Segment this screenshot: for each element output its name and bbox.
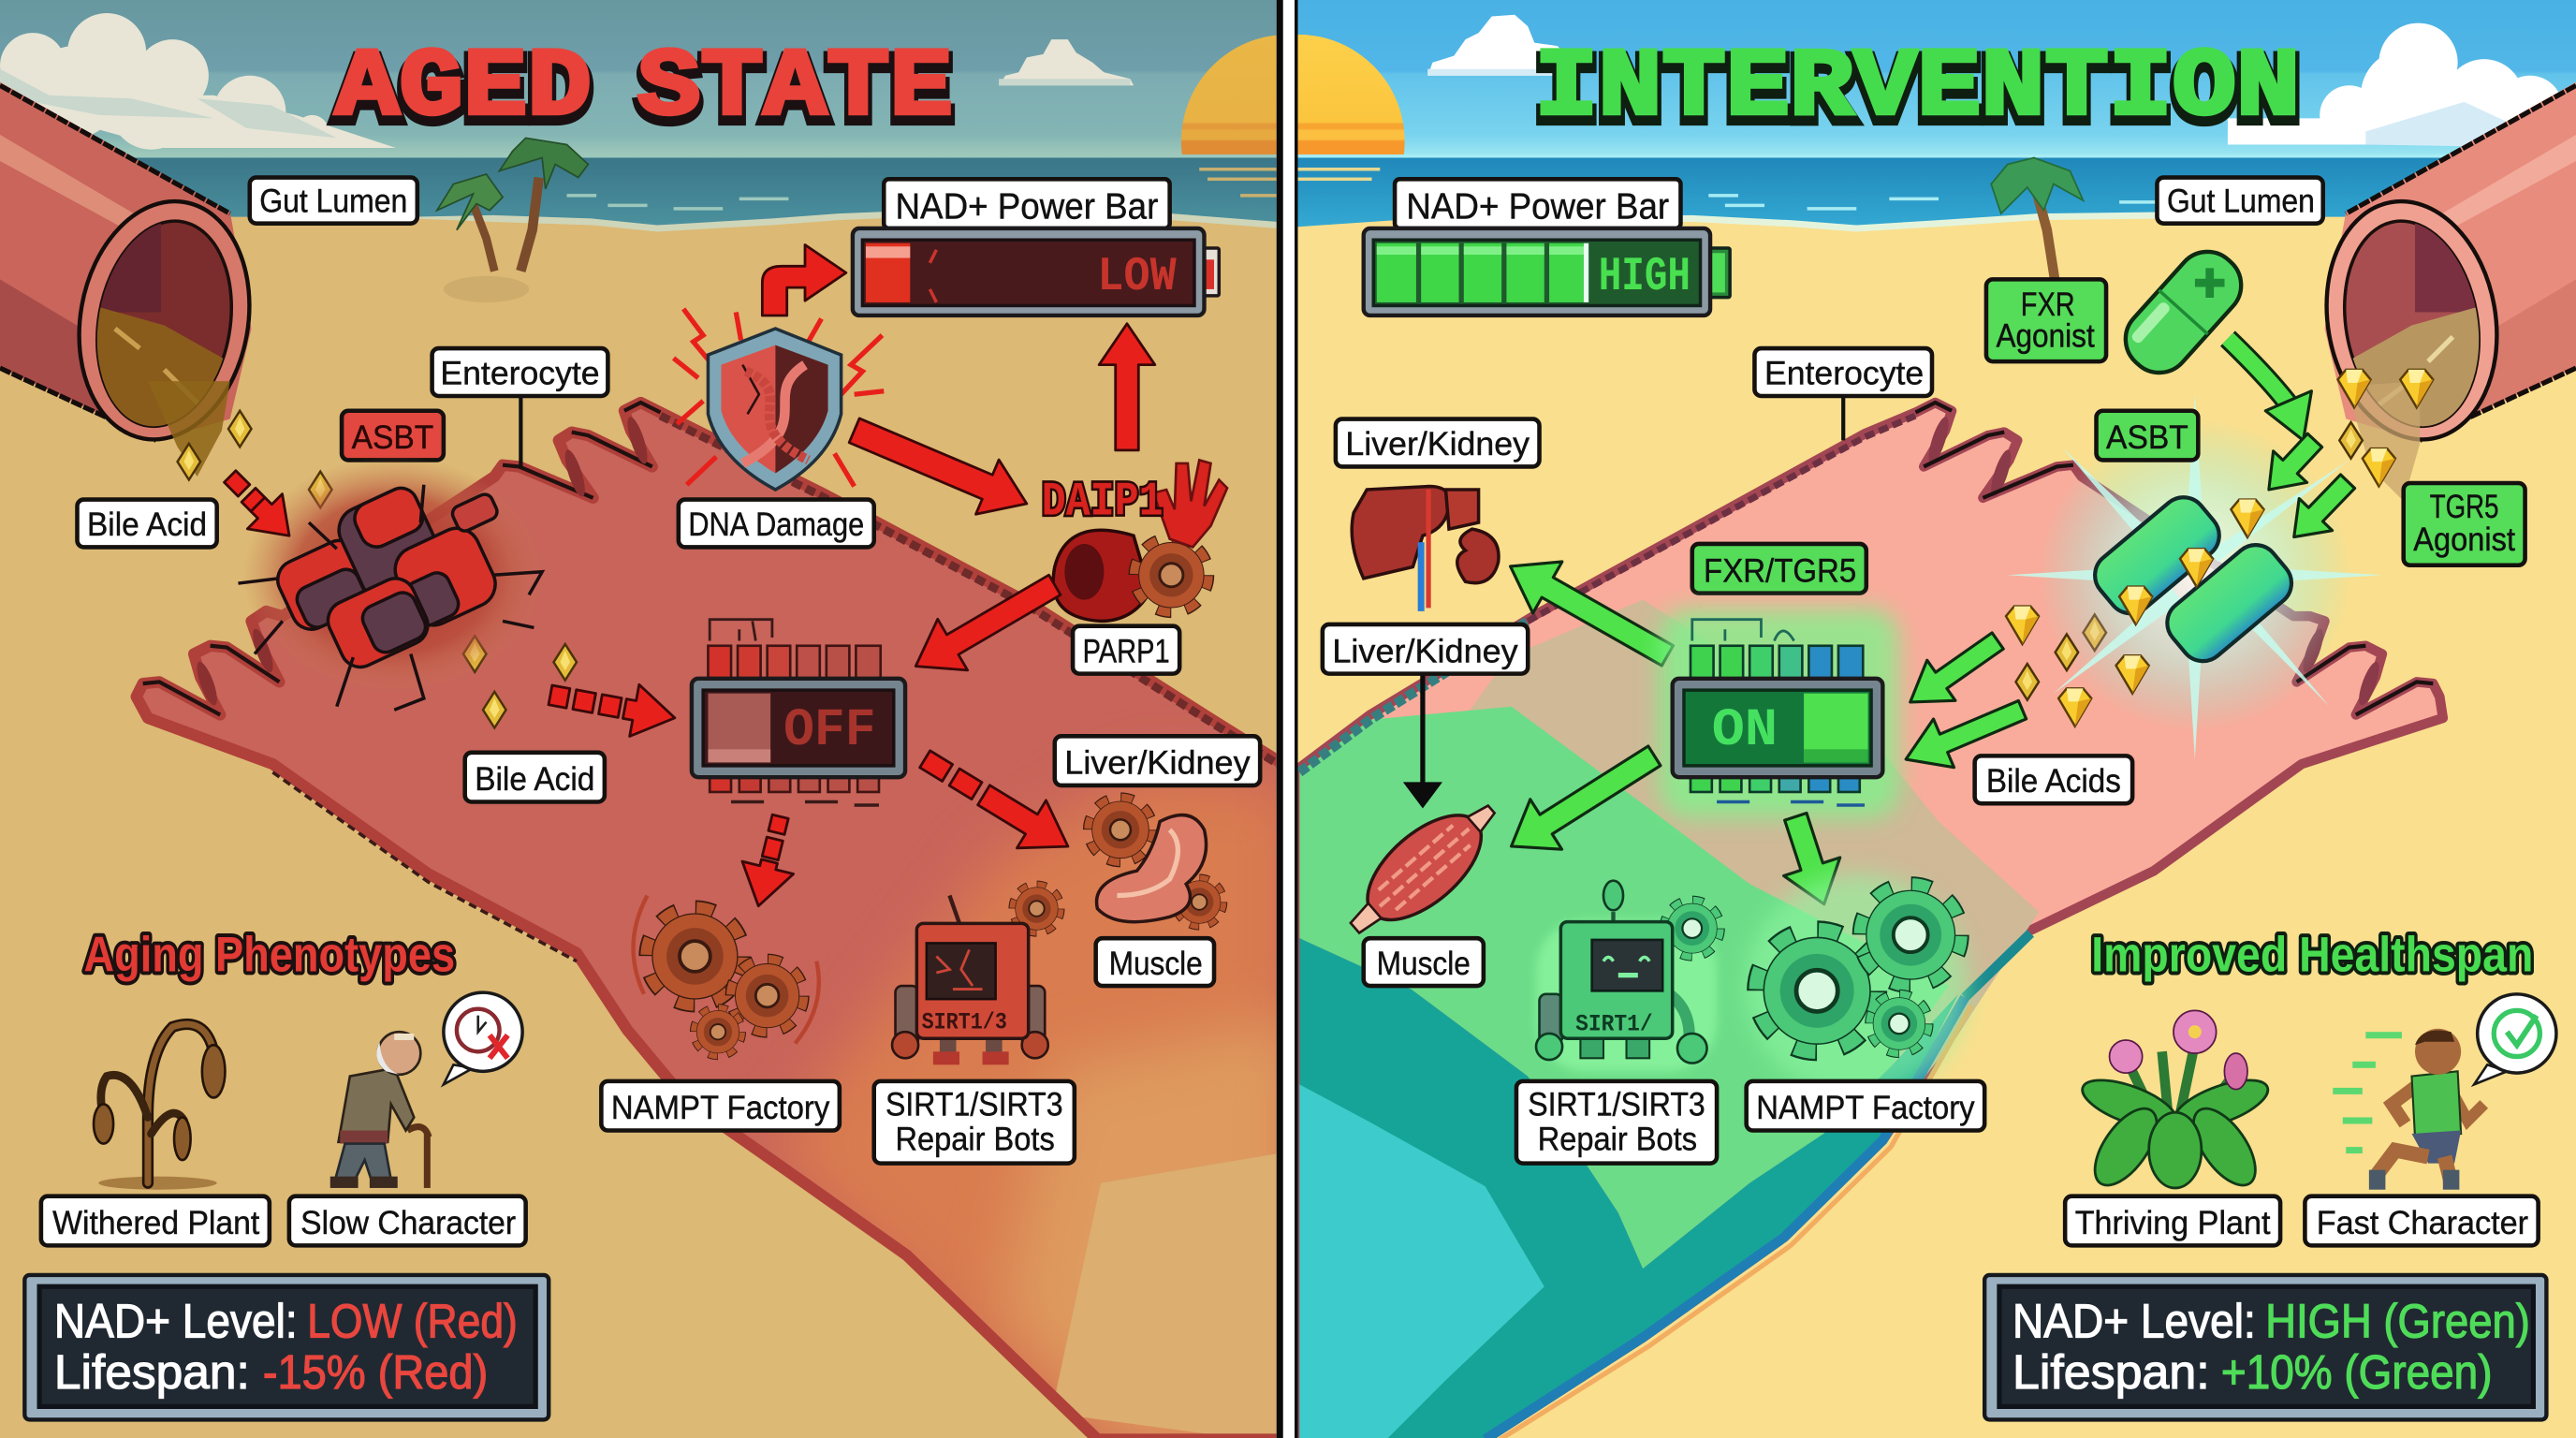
SIRT repair bots label: SIRT1/SIRT3 <box>886 1087 1063 1123</box>
stats box intervention <box>1984 1275 2546 1419</box>
withered plant label <box>41 1196 270 1245</box>
icon: thriving plant <box>2077 1010 2274 1196</box>
arrow: PARP1 up to battery <box>1099 324 1155 450</box>
icon: healthy muscle <box>1332 784 1514 954</box>
panel: aged state <box>0 0 1395 1438</box>
shore foam <box>411 211 1278 231</box>
bile acid label <box>77 500 217 547</box>
NAD+ power bar label: NAD+ Power Bar <box>1406 186 1669 227</box>
SIRT repair bots label <box>1516 1081 1717 1164</box>
PARP1 label <box>1073 626 1179 674</box>
cloud shading <box>0 69 1131 138</box>
fast character label <box>2305 1196 2539 1245</box>
DNA damage label: DNA Damage <box>688 506 864 543</box>
gut lumen label: Gut Lumen <box>259 183 407 219</box>
TGR5 agonist label: TGR5 <box>2430 489 2499 525</box>
enterocyte tissue <box>98 378 1298 1438</box>
bile acids label: Bile Acids <box>1986 763 2121 800</box>
icon: withered plant <box>94 1024 225 1190</box>
clouds <box>0 13 1134 150</box>
FXR agonist label: FXR <box>2021 286 2075 323</box>
NAD+ power bar battery high <box>1364 228 1730 315</box>
slow character label: Slow Character <box>300 1205 516 1241</box>
title: aged state: AGED <box>335 34 592 142</box>
thriving plant label: Thriving Plant <box>2075 1205 2271 1241</box>
FXR switch off: OFF <box>783 700 875 760</box>
fast character label: Fast Character <box>2317 1205 2528 1241</box>
arrow: DNA damage to PARP1 <box>842 404 1038 531</box>
FXR switch on <box>1660 608 1899 818</box>
icon: slow old character <box>330 1032 431 1188</box>
sea wavelets <box>567 154 1277 211</box>
withered plant label: Withered Plant <box>52 1205 260 1241</box>
sand <box>0 215 1278 1438</box>
stats box aged: Lifespan: <box>54 1345 250 1399</box>
stats box intervention: HIGH (Green) <box>2265 1295 2530 1348</box>
ASBT label green <box>2097 411 2198 460</box>
icon: repair bot happy <box>1536 881 1719 1071</box>
sky <box>0 0 1278 157</box>
clouds <box>1427 15 2576 144</box>
stats box intervention: +10% (Green) <box>2221 1345 2492 1399</box>
NAD+ power bar battery high: HIGH <box>1599 251 1690 304</box>
PARP1 label: PARP1 <box>1083 633 1170 669</box>
liver/kidney label top <box>1336 419 1540 466</box>
icon: gut lumen pipe <box>2308 82 2576 501</box>
icon: bright sun <box>1191 35 1405 248</box>
bile acid gems <box>2006 370 2433 726</box>
bile acid gems falling from pipe <box>178 411 577 728</box>
arrow: gems to ASBT 1 <box>2252 425 2332 506</box>
cloud shading <box>1427 69 2563 148</box>
bile acid label 2: Bile Acid <box>475 761 594 798</box>
arrow: gems to ASBT 2 <box>2277 465 2364 553</box>
icon: palm tree <box>1991 157 2083 283</box>
NAD+ power bar battery low: LOW <box>1097 251 1177 304</box>
shore foam <box>1397 212 2169 231</box>
NAMPT factory label: NAMPT Factory <box>611 1090 830 1126</box>
NAMPT factory label <box>601 1081 840 1131</box>
icon: gut lumen pipe <box>0 82 268 477</box>
sea <box>135 157 1277 225</box>
dashed arrow: bile acid to ASBT <box>223 469 290 537</box>
muscle label <box>1364 938 1484 986</box>
icon: setting sun <box>1181 36 1277 154</box>
icon: repair bot happy: SIRT1/ <box>1575 1012 1653 1037</box>
NAD+ power bar label: NAD+ Power Bar <box>896 186 1158 227</box>
arrow: bile acid to switch 2 <box>1895 685 2033 784</box>
enterocyte label with leader <box>432 348 607 468</box>
title: aged state <box>335 34 953 149</box>
damaged ASBT transporter <box>238 457 546 710</box>
NAD+ power bar battery low <box>853 228 1219 315</box>
gut lumen label: Gut Lumen <box>2167 183 2315 219</box>
ASBT label red <box>342 411 444 460</box>
title: aged state: STATE <box>637 40 953 149</box>
SIRT repair bots label: Repair Bots <box>896 1122 1055 1158</box>
FXR agonist label: Agonist <box>1996 317 2095 354</box>
bile acid label: Bile Acid <box>87 506 207 543</box>
stats box intervention: NAD+ Level: <box>2012 1295 2256 1348</box>
icon: slow clock bubble <box>444 992 522 1084</box>
SIRT repair bots label: SIRT1/SIRT3 <box>1528 1087 1705 1123</box>
icon: check bubble <box>2474 994 2556 1084</box>
stats box aged <box>24 1275 549 1419</box>
panel: intervention <box>1191 0 2576 1438</box>
PARP1 icon with hand, blood and gear: DAIP1 <box>1042 476 1164 529</box>
ASBT label red: ASBT <box>352 419 433 456</box>
stats box aged: LOW (Red) <box>307 1295 518 1348</box>
TGR5 agonist label <box>2404 483 2525 565</box>
sea <box>1298 157 2576 231</box>
liver/kidney label with arrow to muscle <box>1323 624 1528 809</box>
sky <box>1298 0 2576 157</box>
active ASBT transporter with burst <box>2008 394 2382 759</box>
muscle label: Muscle <box>1377 946 1471 982</box>
arrow: switch to muscle <box>1496 731 1670 872</box>
icon: broken repair bot <box>892 887 1059 1064</box>
FXR/TGR5 label <box>1692 544 1866 594</box>
enterocyte tissue <box>1298 403 2443 1438</box>
icon: broken repair bot: SIRT1/3 <box>922 1011 1007 1036</box>
icon: NAMPT factory gears <box>634 896 819 1054</box>
dashed arrow: switch to muscle <box>911 735 1082 871</box>
title: intervention: INTERVENTION <box>1534 40 2300 149</box>
stats box intervention: Lifespan: <box>2012 1345 2210 1399</box>
stats box aged: NAD+ Level: <box>54 1295 298 1348</box>
icon: liver and kidney <box>1352 487 1499 611</box>
bile acids label <box>1975 756 2132 803</box>
thriving plant label <box>2065 1196 2280 1245</box>
liver/kidney label: Liver/Kidney <box>1064 745 1251 782</box>
icon: FXR agonist pill <box>2113 239 2254 386</box>
bile acid label 2 <box>465 753 605 801</box>
sea wavelets <box>1298 154 2576 211</box>
SIRT repair bots label <box>874 1081 1075 1164</box>
NAMPT factory label: NAMPT Factory <box>1756 1090 1975 1126</box>
enterocyte label with leader: Enterocyte <box>440 356 600 392</box>
FXR agonist label <box>1986 279 2106 361</box>
liver/kidney label <box>1055 736 1260 785</box>
icon: NAMPT factory gears active <box>1745 874 1969 1097</box>
arrow: PARP1 to switch <box>900 560 1070 692</box>
PARP1 icon with hand, blood and gear <box>1042 460 1227 621</box>
arrow: shield to battery <box>762 245 846 315</box>
ASBT label green: ASBT <box>2106 419 2188 456</box>
muscle label <box>1096 938 1214 986</box>
arrow: bile acid to switch 1 <box>1896 621 2012 722</box>
heading: aging phenotypes: Aging Phenotypes <box>84 927 455 982</box>
title: intervention: INTERVENTION <box>1534 34 2300 142</box>
title: aged state: STATE <box>637 34 953 142</box>
FXR/TGR5 label: FXR/TGR5 <box>1704 552 1856 589</box>
TGR5 agonist label: Agonist <box>2413 521 2515 558</box>
icon: fast runner <box>2333 1029 2484 1190</box>
dashed arrow: switch to NAMPT <box>733 811 806 912</box>
sand <box>1298 217 2576 1438</box>
enterocyte label with leader: Enterocyte <box>1764 356 1924 392</box>
divider <box>1277 0 1299 1438</box>
icon: muscle with gears <box>1090 800 1222 925</box>
enterocyte label with leader <box>1754 348 1932 440</box>
DNA damage label <box>679 500 874 547</box>
dashed arrow: bile acid to switch <box>546 669 680 743</box>
muscle label: Muscle <box>1109 946 1203 982</box>
icon: cracked DNA shield <box>674 309 884 490</box>
arrow: switch to NAMPT <box>1767 808 1852 914</box>
SIRT repair bots label: Repair Bots <box>1538 1122 1697 1158</box>
NAMPT factory label <box>1747 1081 1984 1131</box>
arrow: switch to liver <box>1496 540 1682 682</box>
liver/kidney label top: Liver/Kidney <box>1345 426 1530 462</box>
icon: palm trees <box>437 138 588 302</box>
arrow: FXR agonist to ASBT <box>2228 339 2311 440</box>
FXR switch off <box>692 620 905 805</box>
title: aged state: AGED <box>335 40 592 149</box>
FXR switch on: ON <box>1712 700 1778 760</box>
stats box aged: -15% (Red) <box>263 1345 488 1399</box>
liver/kidney label with arrow to muscle: Liver/Kidney <box>1332 633 1518 669</box>
